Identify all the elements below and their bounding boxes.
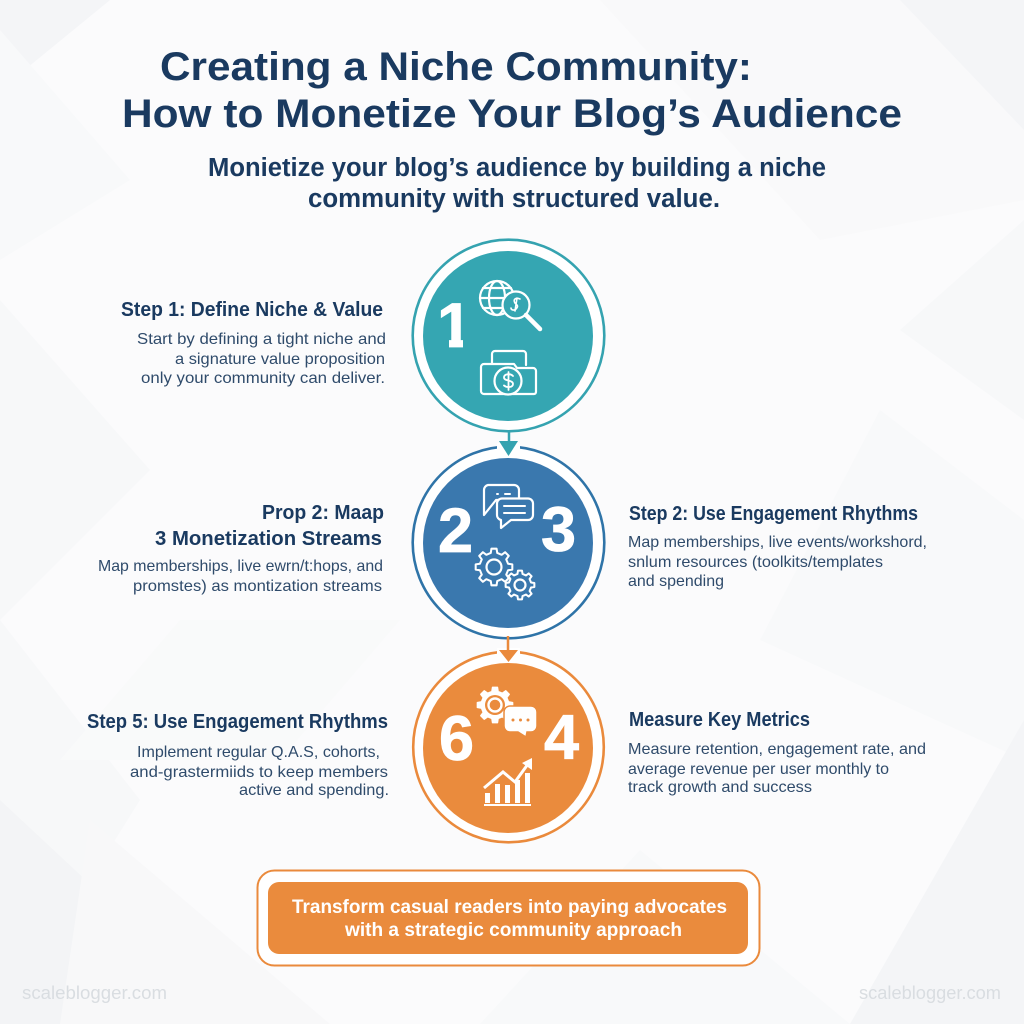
number 4: 4 — [544, 703, 579, 773]
title — [122, 45, 902, 136]
text block: step 1: only your community can deliver. — [141, 370, 385, 387]
subtitle: Monietize your blog’s audience by building a niche — [208, 154, 826, 182]
panel: blue circle — [413, 447, 604, 638]
panel: teal circle — [413, 240, 604, 431]
icon: chat bubbles — [484, 485, 533, 528]
subtitle: community with structured value. — [308, 185, 720, 213]
icon: growth chart — [484, 758, 532, 805]
text block: engagement rhythms: and spending — [628, 573, 724, 590]
callout: with a strategic community approach — [344, 920, 682, 941]
text block: monetization streams — [98, 502, 384, 595]
number 1: 1 — [437, 291, 472, 361]
callout: Transform casual readers into paying advocates — [292, 897, 727, 918]
footer: left watermark: scaleblogger.com — [22, 983, 167, 1003]
text block: step 5: and-grastermiids to keep members — [130, 764, 388, 781]
text block: monetization streams: Prop 2: Maap — [262, 502, 384, 524]
icon: large gear — [476, 549, 512, 585]
text block: step 1: Start by defining a tight niche and — [137, 331, 386, 348]
icon: filled speech bubble — [504, 706, 537, 737]
icon: small gear — [506, 571, 534, 599]
number 3: 3 — [541, 495, 576, 565]
text block: monetization streams: 3 Monetization Streams — [155, 528, 382, 550]
title: How to Monetize Your Blog’s Audience — [122, 92, 902, 136]
icon: money stack — [481, 351, 536, 394]
icon: globe with magnifier — [480, 281, 540, 329]
subtitle — [208, 154, 826, 213]
footer: right watermark: scaleblogger.com — [859, 983, 1001, 1003]
text block: step 5: Implement regular Q.A.S, cohorts, — [137, 744, 380, 761]
text block: engagement rhythms: Step 2: Use Engagement Rhythms — [629, 503, 918, 525]
text block: step 5: active and spending. — [239, 782, 389, 799]
text block: engagement rhythms: Map memberships, live events/workshord, — [628, 534, 927, 551]
text block: measure key metrics: average revenue per user monthly to — [628, 761, 889, 778]
panel: orange circle — [413, 652, 604, 842]
text block: monetization streams: Map memberships, live ewrn/t:hops, and — [98, 558, 383, 575]
arrow: orange connector — [497, 636, 520, 662]
text block: engagement rhythms — [628, 503, 927, 590]
arrow: teal connector — [497, 432, 520, 456]
icon: gear — [477, 687, 513, 723]
number 6: 6 — [439, 704, 474, 774]
text block: monetization streams: promstes) as montization streams — [133, 578, 382, 595]
text block: measure key metrics — [628, 709, 926, 796]
title: Creating a Niche Community: — [160, 45, 752, 89]
callout — [258, 870, 760, 966]
text block: step 1: Step 1: Define Niche & Value — [121, 299, 383, 321]
text block: step 1: a signature value proposition — [175, 351, 385, 368]
text block: measure key metrics: track growth and success — [628, 779, 812, 796]
text block: step 1 — [121, 299, 386, 387]
text block: engagement rhythms: snlum resources (toolkits/templates — [628, 554, 883, 571]
text block: measure key metrics: Measure retention, engagement rate, and — [628, 741, 926, 758]
text block: step 5 — [87, 711, 389, 799]
number 2: 2 — [438, 496, 473, 566]
text block: measure key metrics: Measure Key Metrics — [629, 709, 810, 731]
text block: step 5: Step 5: Use Engagement Rhythms — [87, 711, 388, 733]
